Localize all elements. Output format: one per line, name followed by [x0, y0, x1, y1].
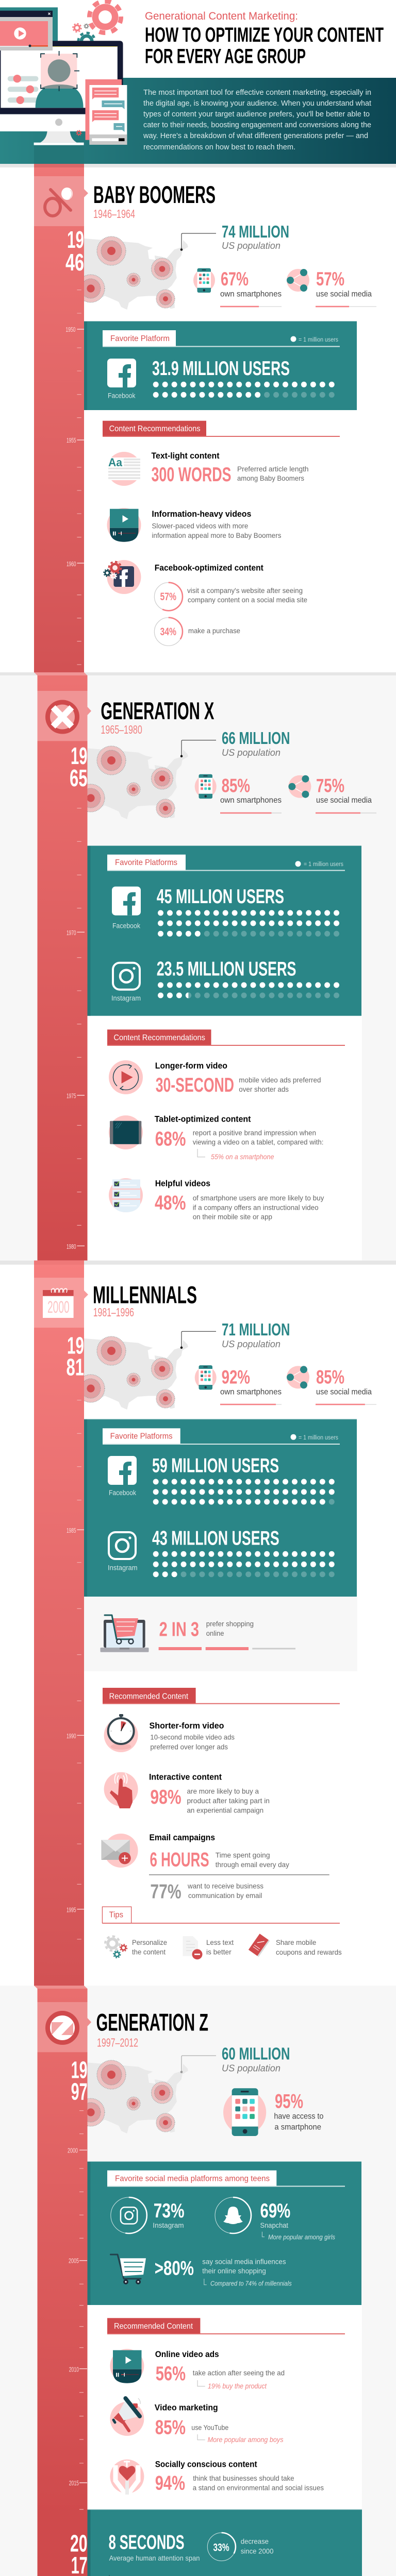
panel: 2 in 3 prefer online shopping	[84, 1597, 357, 1671]
item: shorter-form video: Shorter-form video	[150, 1721, 224, 1731]
item: information-heavy videos: Slower-paced videos with more	[152, 522, 249, 530]
stat: smartphone access	[223, 2088, 323, 2136]
stat: use social media: use social media	[316, 796, 372, 805]
icon: text page: Aa	[108, 456, 123, 469]
stat: use social media: use social media	[316, 1388, 372, 1397]
panel: favorite social media platforms among teens	[88, 2161, 361, 2305]
population stat	[180, 2044, 290, 2074]
item: helpful videos	[109, 1178, 324, 1221]
stat: social media influences shopping	[110, 2255, 292, 2287]
population stat	[180, 1320, 290, 1349]
item: information-heavy videos: Information-heavy videos	[152, 509, 251, 519]
stat: 8 seconds: Average human attention span	[109, 2554, 200, 2562]
item: facebook-optimized content: make a purchase	[188, 626, 240, 635]
icon: tablet	[109, 1115, 143, 1149]
stat: smartphone access: have access to	[274, 2112, 323, 2121]
icon: megaphone	[110, 2398, 144, 2436]
tab: favorite platforms	[107, 855, 186, 870]
stat: social media influences shopping: Compared to 74% of millennials	[210, 2280, 292, 2287]
tip: share mobile coupons	[249, 1934, 342, 1957]
population stat: 66 MILLION	[222, 728, 290, 748]
icon: video player	[110, 2349, 144, 2383]
stat: use social media: 75%	[316, 775, 344, 796]
item: socially conscious content: 94%	[155, 2472, 185, 2495]
population stat: 74 MILLION	[222, 222, 289, 241]
heading: MILLENNIALS	[93, 1281, 197, 1308]
stat: snapchat 69%: 69%	[260, 2200, 290, 2222]
stat: social media influences shopping: say social media influences	[202, 2257, 286, 2265]
tab: content recommendations	[107, 1029, 345, 1046]
intro band	[0, 78, 396, 164]
tab: tips: Tips	[109, 1911, 123, 1920]
heading: BABY BOOMERS	[93, 181, 216, 208]
item: email campaigns: 77%	[150, 1880, 182, 1903]
donut: 33% decrease: decrease	[241, 2537, 269, 2546]
section: millennials	[0, 1261, 396, 1986]
stat: social media influences shopping: their online shopping	[202, 2267, 266, 2275]
donut: 33% decrease: 33%	[213, 2542, 229, 2554]
item: video marketing	[110, 2398, 284, 2444]
icon: envelope	[101, 1834, 138, 1868]
stat: 2 IN 3	[159, 1618, 199, 1640]
tip: less text is better: Less text	[206, 1938, 234, 1946]
item: information-heavy videos: information appeal more to Baby Boomers	[152, 531, 281, 539]
item: facebook-optimized content: visit a company's website after seeing	[187, 586, 303, 595]
timeline bar: 1997 to 2012: 20	[70, 2530, 88, 2557]
stat: smartphone access: a smartphone	[274, 2123, 321, 2131]
users figure: 31.9 MILLION USERS	[152, 358, 290, 380]
main title: FOR EVERY AGE GROUP	[145, 45, 306, 68]
timeline bar: 1981 to 1996: 81	[66, 1353, 84, 1380]
intro paragraph	[143, 88, 372, 151]
timeline bar: 1997 to 2012: 2015	[69, 2479, 79, 2487]
item: helpful videos: on their mobile site or app	[193, 1213, 272, 1221]
icon: stopwatch	[104, 1714, 138, 1752]
item: email campaigns: communication by email	[188, 1891, 262, 1900]
item: interactive content: an experiential campaign	[187, 1806, 263, 1814]
icon: facebook	[112, 887, 141, 916]
intro paragraph: recommendations on how best to reach them.	[143, 143, 295, 151]
item: longer-form video: mobile video ads preferred	[239, 1076, 321, 1084]
item: online video ads: 56%	[156, 2363, 186, 2385]
users figure: 59 MILLION USERS	[152, 1454, 279, 1477]
icon: calendar: 2000	[47, 1298, 70, 1316]
label: Facebook	[108, 392, 136, 400]
timeline bar: 1946 to 1964: 1950	[65, 326, 75, 333]
population stat: US population	[222, 747, 280, 758]
map: US population hot spots	[77, 236, 188, 310]
timeline bar: 1946 to 1964: 46	[65, 249, 84, 276]
donut: 33% decrease: since 2000	[241, 2547, 274, 2555]
legend: = 1 million users	[299, 1435, 338, 1441]
item: longer-form video: Longer-form video	[155, 1061, 227, 1071]
tab: tips	[102, 1907, 340, 1924]
item: shorter-form video: 10-second mobile video ads	[150, 1733, 235, 1741]
item: shorter-form video	[104, 1714, 235, 1752]
stat: social media influences shopping: >80%	[155, 2258, 194, 2280]
users figure: 43 MILLION USERS	[152, 1527, 279, 1549]
item: tablet-optimized content: 55% on a smartphone	[211, 1153, 274, 1161]
item: email campaigns: 6 HOURS	[150, 1849, 209, 1871]
tab: Favorite social media platforms among teens	[115, 2174, 270, 2183]
tab: favorite platform: Favorite Platform	[110, 334, 170, 343]
item: tablet-optimized content	[109, 1114, 324, 1161]
timeline bar: 1997 to 2012: 2000	[68, 2146, 78, 2154]
item: facebook-optimized content: company content on a social media site	[188, 596, 307, 604]
population stat: US population	[222, 240, 280, 251]
item: information-heavy videos	[107, 508, 281, 542]
timeline bar: 1946 to 1964: 1960	[67, 560, 76, 568]
stat: own smartphones: 92%	[222, 1367, 250, 1388]
legend: = 1 million users	[304, 861, 343, 868]
timeline bar: 1946 to 1964: 1955	[67, 436, 76, 444]
heading: GENERATION Z	[96, 2009, 208, 2036]
date range: 1997–2012	[97, 2036, 138, 2049]
stat: own smartphones: own smartphones	[220, 1388, 282, 1397]
intro paragraph: cater to their needs, boosting engagement and conversions along the	[143, 121, 371, 129]
stat: use social media	[288, 775, 376, 814]
icon: facebook with gears	[104, 560, 141, 594]
stat: 8 seconds	[109, 2531, 200, 2562]
intro paragraph: types of content your target audience prefers, you'll be better able to	[143, 110, 370, 118]
item: video marketing: 85%	[155, 2416, 186, 2438]
tip: personalize the content: the content	[132, 1947, 166, 1956]
donut: 57%: 57%	[160, 591, 176, 603]
tab: recommended content	[103, 1688, 340, 1704]
item: tablet-optimized content: 68%	[155, 1128, 186, 1150]
item: tablet-optimized content: report a positive brand impression when	[193, 1128, 316, 1137]
item: helpful videos: Helpful videos	[155, 1179, 210, 1189]
population stat: US population	[222, 2063, 280, 2074]
timeline bar: 1965 to 1980: 1980	[67, 1243, 76, 1250]
panel: favorite platforms	[84, 1419, 357, 1597]
timeline bar: 1981 to 1996: 1990	[67, 1732, 76, 1740]
panel: video attention stats	[88, 2510, 362, 2576]
icon: hands holding heart	[110, 2460, 144, 2495]
caption: online	[206, 1629, 224, 1637]
stat: branded video views	[109, 2575, 283, 2576]
item: text-light content: Preferred article length	[237, 465, 308, 473]
population stat: US population	[222, 1338, 280, 1349]
intro paragraph: The most important tool for effective content marketing, especially in	[143, 88, 371, 97]
item: email campaigns: Email campaigns	[150, 1833, 215, 1842]
item: helpful videos: 48%	[155, 1192, 186, 1214]
tip: share mobile coupons: coupons and rewards	[276, 1948, 342, 1956]
item: socially conscious content	[110, 2459, 324, 2495]
icon: circled Z	[47, 2013, 77, 2042]
item: helpful videos: if a company offers an instructional video	[193, 1203, 319, 1211]
tab: content recommendations	[103, 421, 340, 437]
stat: own smartphones	[195, 1365, 282, 1405]
icon: pacifier	[45, 188, 73, 216]
stat: own smartphones: 67%	[221, 268, 249, 290]
stat: instagram 73%: 73%	[154, 2200, 185, 2222]
item: socially conscious content: Socially conscious content	[155, 2459, 257, 2469]
timeline bar: 1946 to 1964	[34, 164, 88, 672]
stat: own smartphones	[193, 268, 282, 307]
intro paragraph: the digital age, is knowing your audience. When you understand what	[143, 99, 372, 108]
icon: looping play button	[109, 1060, 143, 1094]
timeline bar: 1981 to 1996: 1995	[67, 1906, 76, 1914]
timeline bar: 1965 to 1980: 1970	[67, 929, 76, 937]
hero illustration: content optimisation monitor	[0, 1, 127, 145]
item: video marketing: use YouTube	[191, 2424, 228, 2432]
timeline bar: 1997 to 2012	[34, 1986, 91, 2576]
item: longer-form video: 30-SECOND	[156, 1074, 234, 1096]
icon: shopping cart on laptop	[100, 1615, 148, 1652]
population stat	[180, 728, 290, 758]
donut: 34%	[154, 618, 183, 646]
dot chart: 43 million	[156, 1554, 332, 1574]
panel: favorite platform	[84, 321, 357, 410]
caption: prefer shopping	[206, 1620, 254, 1628]
population stat	[180, 222, 289, 251]
tab: favorite platforms: Favorite Platforms	[110, 1432, 173, 1441]
dot chart: 45 million	[161, 913, 337, 934]
stat: instagram 73%: Instagram	[153, 2222, 184, 2229]
stat: instagram 73%	[111, 2197, 185, 2233]
tip: less text is better	[183, 1936, 234, 1959]
date range: 1981–1996	[93, 1306, 134, 1319]
label: Instagram	[108, 1564, 137, 1572]
legend: = 1 million users	[299, 337, 338, 343]
timeline bar: 1965 to 1980	[34, 672, 91, 1261]
stat: own smartphones: 85%	[222, 775, 250, 796]
item: online video ads: Online video ads	[155, 2349, 219, 2359]
panel: favorite platforms	[88, 845, 361, 1016]
icon: text page	[106, 452, 143, 486]
date range: 1946–1964	[93, 207, 135, 221]
icon: facebook	[107, 359, 136, 387]
stat: use social media: use social media	[316, 290, 372, 299]
item: tablet-optimized content: viewing a video on a tablet, compared with:	[193, 1138, 324, 1146]
tab: recommended content: Recommended Content	[114, 2322, 193, 2331]
stat: own smartphones	[195, 774, 282, 814]
item: helpful videos: of smartphone users are more likely to buy	[193, 1194, 324, 1202]
tip: personalize the content	[105, 1936, 167, 1958]
timeline bar: 1997 to 2012: 19	[71, 2056, 88, 2083]
tab: favorite platforms: Favorite Platforms	[115, 858, 177, 867]
stat: snapchat 69%: Snapchat	[260, 2222, 288, 2229]
item: online video ads	[110, 2349, 285, 2390]
dot chart: 23.5 million	[161, 985, 337, 998]
population stat: 60 MILLION	[222, 2044, 290, 2063]
item: video marketing: Video marketing	[155, 2402, 218, 2412]
item: text-light content	[106, 451, 308, 486]
donut: 57%	[154, 583, 183, 611]
timeline bar: 1997 to 2012: 97	[71, 2078, 88, 2105]
users figure: 23.5 MILLION USERS	[157, 958, 296, 980]
timeline bar: 1946 to 1964: 19	[67, 226, 84, 253]
map: US population hot spots	[77, 2060, 188, 2133]
date range: 1965–1980	[101, 723, 142, 736]
tab: recommended content: Recommended Content	[109, 1692, 189, 1701]
hero header	[0, 1, 396, 167]
timeline bar: 1981 to 1996	[34, 1261, 88, 1986]
label: Instagram	[111, 994, 141, 1002]
section: baby boomers	[34, 164, 376, 672]
item: facebook-optimized content	[104, 560, 307, 646]
stat: use social media: 57%	[316, 268, 344, 290]
tab: content recommendations: Content Recommendations	[109, 425, 201, 433]
dot chart: 31.9 million	[156, 384, 332, 395]
item: interactive content: are more likely to buy a	[187, 1787, 259, 1795]
population stat: 71 MILLION	[222, 1320, 290, 1339]
tip: share mobile coupons: Share mobile	[276, 1938, 316, 1946]
tab: favorite platforms	[103, 1428, 180, 1444]
item: socially conscious content: think that businesses should take	[193, 2474, 294, 2482]
item: video marketing: More popular among boys	[208, 2435, 284, 2444]
main title	[145, 24, 384, 68]
icon: checklist	[109, 1178, 143, 1212]
timeline bar: 1981 to 1996: 19	[67, 1332, 84, 1359]
icon: instagram	[109, 1532, 136, 1559]
item: email campaigns	[101, 1833, 329, 1903]
tab: content recommendations: Content Recommendations	[113, 1033, 205, 1042]
kicker: Generational Content Marketing:	[145, 10, 298, 22]
item: longer-form video: over shorter ads	[239, 1085, 289, 1093]
timeline bar: 1997 to 2012: 2005	[69, 2257, 79, 2265]
stat: smartphone access: 95%	[275, 2091, 303, 2113]
donut: 33% decrease	[207, 2533, 274, 2561]
timeline bar: 1965 to 1980: 19	[71, 742, 88, 769]
timeline bar: 1965 to 1980: 1975	[67, 1092, 76, 1100]
timeline bar: 1965 to 1980: 65	[70, 765, 88, 791]
tab: favorite platform	[103, 330, 176, 346]
stat: use social media: 85%	[316, 1367, 344, 1388]
tip: less text is better: is better	[206, 1947, 232, 1956]
item: email campaigns: Time spent going	[216, 1851, 270, 1859]
item: online video ads: take action after seeing the ad	[193, 2369, 285, 2377]
stat: own smartphones: own smartphones	[220, 290, 282, 299]
icon: video player	[107, 508, 141, 542]
icon: facebook	[108, 1456, 137, 1485]
icon: calendar	[43, 1289, 74, 1318]
item: text-light content: Text-light content	[152, 451, 220, 461]
section: generation x	[0, 672, 396, 1261]
item: interactive content: 98%	[150, 1786, 182, 1808]
item: tablet-optimized content: Tablet-optimized content	[155, 1114, 251, 1124]
intro paragraph: way. Here's a breakdown of what different generations prefer — and	[143, 131, 368, 140]
stat: use social media	[287, 268, 376, 307]
users figure: 45 MILLION USERS	[157, 886, 284, 908]
icon: circled X	[47, 702, 77, 732]
item: online video ads: 19% buy the product	[208, 2382, 267, 2390]
item: socially conscious content: a stand on environmental and social issues	[193, 2483, 324, 2492]
stat: 8 seconds: 8 SECONDS	[109, 2531, 185, 2553]
section: generation z	[0, 1986, 396, 2576]
stat: snapchat 69%	[215, 2197, 335, 2241]
timeline bar: 1997 to 2012: 2010	[69, 2365, 79, 2373]
legend	[291, 336, 338, 343]
tip: personalize the content: Personalize	[132, 1938, 167, 1946]
item: email campaigns: through email every day	[216, 1860, 289, 1869]
dot chart: 59 million	[156, 1482, 332, 1502]
stat: use social media	[287, 1366, 376, 1405]
icon: tapping hand	[104, 1772, 138, 1808]
timeline bar: 1981 to 1996: 1985	[67, 1527, 76, 1534]
stat: own smartphones: own smartphones	[220, 796, 282, 805]
item: interactive content	[104, 1772, 270, 1814]
donut: 34%: 34%	[160, 626, 176, 638]
item: text-light content: 300 WORDS	[152, 464, 231, 486]
ratio bars	[159, 1647, 295, 1650]
tab: recommended content	[107, 2318, 345, 2334]
heading: GENERATION X	[101, 697, 214, 724]
item: longer-form video	[109, 1060, 321, 1096]
item: text-light content: among Baby Boomers	[237, 474, 304, 482]
item: interactive content: Interactive content	[149, 1772, 222, 1782]
map: US population hot spots	[77, 1336, 188, 1410]
label: Facebook	[112, 922, 140, 930]
icon: instagram	[113, 963, 140, 990]
label: Facebook	[109, 1489, 136, 1497]
stat: snapchat 69%: More popular among girls	[268, 2233, 335, 2241]
tab	[107, 2171, 276, 2186]
item: interactive content: product after taking part in	[187, 1797, 270, 1805]
item: email campaigns: want to receive business	[187, 1882, 263, 1890]
map: US population hot spots	[77, 746, 188, 819]
item: shorter-form video: preferred over longer ads	[150, 1742, 228, 1751]
item: facebook-optimized content: Facebook-optimized content	[155, 563, 263, 573]
caption	[206, 1620, 254, 1637]
